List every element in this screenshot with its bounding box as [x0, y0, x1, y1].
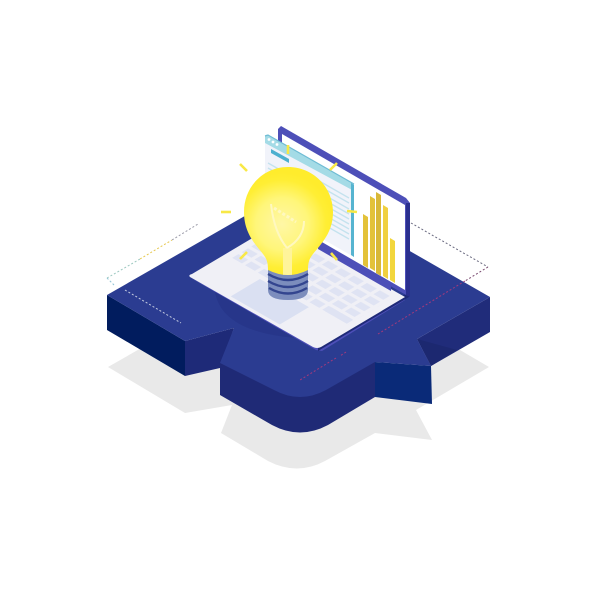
platform right notch shade: [417, 339, 457, 366]
laptop screen frame: [278, 126, 410, 296]
platform: [107, 170, 490, 432]
bulb glass: [244, 167, 333, 275]
window text lines: [268, 163, 349, 239]
window dots: [268, 138, 278, 146]
platform front curved side: [220, 360, 375, 432]
light bulb: [221, 145, 357, 300]
laptop cast shadow: [215, 280, 300, 338]
light rays: [221, 145, 357, 260]
dotted outline: right: [300, 223, 488, 380]
laptop base edge: [189, 277, 405, 351]
laptop base: [189, 224, 405, 348]
laptop base right edge: [318, 292, 409, 351]
screen bottom bar: [318, 244, 391, 291]
keyboard and trackpad: [198, 230, 394, 344]
window top outline: [265, 135, 354, 184]
bulb screw base: [268, 268, 308, 300]
window right edge: [351, 183, 354, 257]
ground shadows: [108, 343, 489, 468]
isometric illustration: [106, 126, 490, 468]
platform right side: [417, 297, 490, 366]
platform wing front side: [185, 328, 234, 376]
platform top surface: [107, 170, 490, 397]
window header: [265, 135, 354, 191]
bar chart: [363, 192, 395, 283]
screen right edge: [406, 203, 410, 297]
screen white area: [282, 134, 405, 290]
dotted outline: left: [107, 224, 198, 323]
platform notch front face: [375, 362, 432, 404]
platform left wing side: [107, 295, 185, 376]
browser window: [265, 135, 354, 257]
window title bar: [271, 149, 289, 163]
bulb filament: [271, 204, 304, 280]
laptop: [189, 126, 410, 351]
window body: [265, 140, 354, 257]
